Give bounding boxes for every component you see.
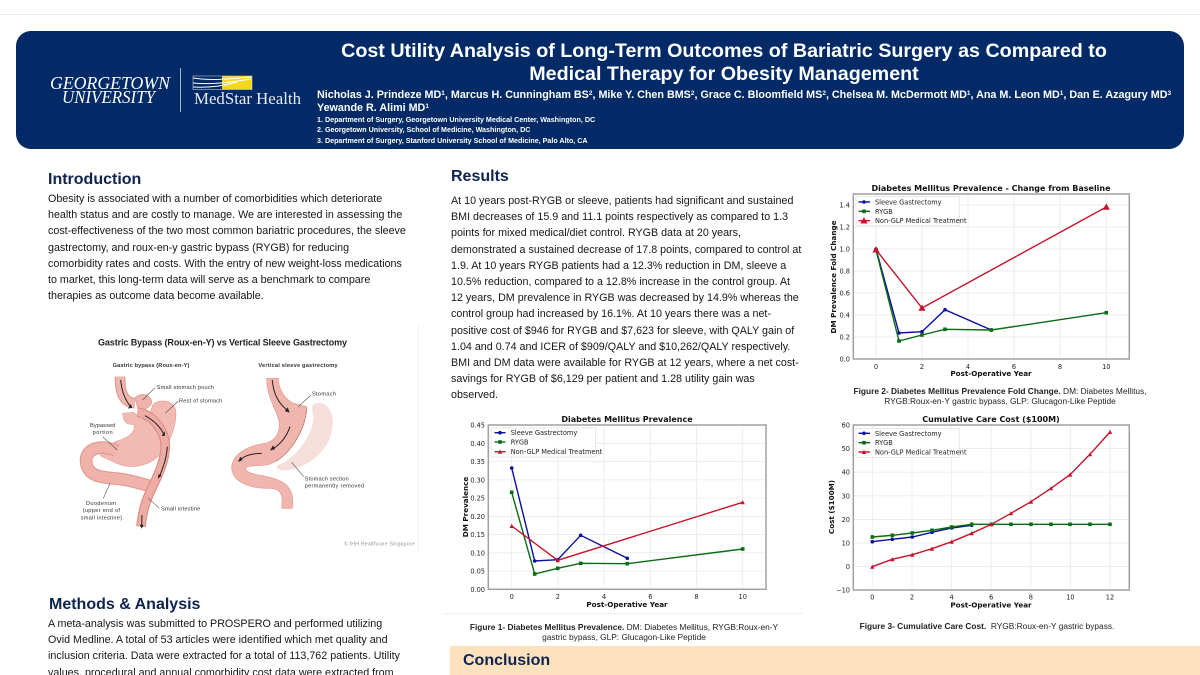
chart: figure 3 cumulative care cost: 10 [1066, 594, 1075, 602]
illustration: vertical sleeve gastrectomy: © IHH Healthcare Singapore [344, 540, 415, 547]
chart: figure 1 diabetes mellitus prevalence: 0.35 [470, 458, 485, 466]
illustration: gastric bypass: small intestine) [81, 515, 122, 521]
illustration: gastric bypass: portion [93, 430, 113, 436]
chart: figure 2 fold change: 0.6 [840, 290, 850, 298]
chart: figure 3 cumulative care cost: 0 [870, 594, 874, 602]
chart: figure 1 diabetes mellitus prevalence: 0.15 [470, 531, 485, 539]
chart: figure 3 cumulative care cost: Cost ($100M) [827, 480, 836, 534]
text: methods [48, 618, 400, 675]
chart: figure 3 cumulative care cost [827, 415, 1130, 610]
illustration: gastric bypass [81, 363, 222, 528]
text: results: 1.04 and 0.74 and ICER of $909/QALY and $10,262/QALY respectively. [451, 341, 790, 353]
chart: figure 3 cumulative care cost: 50 [842, 445, 850, 453]
text: results: BMI decreases of 15.9 and 11.1 points respectively as compared to 1.3 [451, 211, 788, 223]
illustration: gastric bypass: Bypassed [90, 423, 115, 429]
chart: figure 1 diabetes mellitus prevalence: RYGB [511, 438, 529, 446]
chart: figure 2 fold change: 0.4 [840, 312, 850, 320]
affiliations: 2. Georgetown University, School of Medicine, Washington, DC [317, 126, 530, 134]
divider under figure 1 [443, 613, 803, 614]
chart: figure 1 diabetes mellitus prevalence: Sleeve Gastrectomy [511, 429, 577, 437]
text: introduction: to market, this long-term data will serve as a benchmark to compare [48, 274, 370, 286]
text: introduction: gastrectomy, and roux-en-y gastric bypass (RYGB) for reducing [48, 242, 349, 254]
top rule [0, 14, 1200, 15]
illustration: gastric bypass vs sleeve [80, 325, 419, 550]
chart: figure 2 fold change: 0.8 [840, 268, 850, 276]
chart: figure 1 diabetes mellitus prevalence: 0.05 [470, 568, 485, 576]
chart: figure 1 diabetes mellitus prevalence: 0.40 [470, 440, 485, 448]
chart: figure 2 fold change: Post-Operative Year [950, 369, 1032, 378]
chart: figure 1 diabetes mellitus prevalence: Non-GLP Medical Treatment [511, 448, 603, 456]
chart: figure 1 diabetes mellitus prevalence: 0.10 [470, 549, 485, 557]
affiliations: 3. Department of Surgery, Stanford University School of Medicine, Palo Alto, CA [317, 136, 588, 144]
chart: figure 3 cumulative care cost: 10 [842, 540, 850, 548]
logo: Georgetown University [50, 73, 171, 107]
chart: figure 3 cumulative care cost: 6 [989, 594, 993, 602]
heading: methods & analysis: Methods & Analysis [49, 596, 200, 613]
chart: figure 3 cumulative care cost: −10 [836, 586, 850, 594]
text: results: 12 years, DM prevalence in RYGB was decreased by 14.9% whereas the [451, 292, 799, 304]
chart: figure 2 fold change: Diabetes Mellitus Prevalence - Change from Baseline [871, 184, 1111, 193]
chart: figure 3 cumulative care cost: Sleeve Gastrectomy [875, 430, 942, 438]
text: introduction: comorbidity rates and costs. With the entry of new weight-loss medications [48, 258, 402, 270]
chart: figure 2 fold change: Sleeve Gastrectomy [875, 198, 942, 206]
text: introduction: health status and are costly to manage. We are interested in assessing the [48, 209, 402, 221]
chart: figure 1 diabetes mellitus prevalence: 6 [648, 593, 652, 601]
text: results: 10.5% reduction, compared to a 12.8% increase in the control group. At [451, 276, 790, 288]
chart: figure 2 fold change: RYGB [875, 208, 893, 216]
title: Medical Therapy for Obesity Management [529, 63, 919, 85]
text: methods: Ovid Medline. A total of 53 articles were identified which met quality and [48, 634, 388, 646]
logo: Georgetown University: GEORGETOWN [50, 73, 171, 93]
illustration: gastric bypass: Small stomach pouch [157, 385, 214, 391]
caption: figure 3: Figure 3- Cumulative Care Cost. RYGB:Roux-en-Y gastric bypass. [860, 621, 1114, 631]
illustration: gastric bypass: Gastric bypass (Roux-en-Y) [113, 363, 189, 369]
header banner [16, 31, 1184, 149]
chart: figure 1 diabetes mellitus prevalence: Post-Operative Year [586, 600, 668, 609]
text: results: savings for RYGB of $6,129 per patient and 1.28 utility gain was [451, 373, 755, 385]
chart: figure 2 fold change: 6 [1012, 363, 1016, 371]
text: introduction: therapies as outcome data become available. [48, 290, 264, 302]
chart: figure 1 diabetes mellitus prevalence: 0.20 [470, 513, 485, 521]
heading: introduction: Introduction [48, 170, 141, 188]
text: methods: inclusion criteria. Data were extracted for a total of 113,762 patients. Utility [48, 650, 400, 662]
title [341, 40, 1107, 85]
authors [317, 88, 1171, 114]
illustration: gastric bypass: Small intestine [161, 507, 200, 513]
chart: figure 2 fold change [829, 184, 1130, 378]
chart: figure 1 diabetes mellitus prevalence: 0 [510, 593, 514, 601]
chart: figure 2 fold change: 1.4 [840, 202, 850, 210]
chart: figure 2 fold change: 0.2 [840, 334, 850, 342]
chart: figure 2 fold change: 4 [966, 363, 970, 371]
chart: figure 1 diabetes mellitus prevalence: 0.45 [470, 422, 485, 430]
caption: figure 1 [470, 622, 778, 642]
chart: figure 2 fold change: 10 [1102, 363, 1110, 371]
illustration: vertical sleeve gastrectomy: Stomach section [305, 476, 349, 482]
illustration: gastric bypass: (upper end of [83, 508, 120, 514]
chart: figure 3 cumulative care cost: 8 [1029, 594, 1033, 602]
chart: figure 1 diabetes mellitus prevalence: 0.30 [470, 476, 485, 484]
chart: figure 3 cumulative care cost: RYGB [875, 439, 893, 447]
text: results: points for mixed medical/diet control. RYGB data at 20 years, [451, 227, 741, 239]
text: introduction: Obesity is associated with a number of comorbidities which deteriorate [48, 193, 382, 205]
text: results: positive cost of $946 for RYGB and $7,623 for sleeve, with QALY gain of [451, 325, 794, 337]
chart: figure 1 diabetes mellitus prevalence: Diabetes Mellitus Prevalence [561, 415, 693, 424]
chart: figure 2 fold change: 0.0 [840, 356, 850, 364]
text: introduction [48, 193, 406, 302]
chart: figure 3 cumulative care cost: Post-Operative Year [950, 600, 1032, 610]
illustration: gastric bypass vs sleeve: Gastric Bypass (Roux-en-Y) vs Vertical Sleeve Gastrectomy [98, 338, 347, 348]
chart: figure 1 diabetes mellitus prevalence: 2 [556, 593, 560, 601]
logo: MedStar Health [192, 76, 301, 108]
chart: figure 2 fold change: 0 [874, 363, 878, 371]
chart: figure 3 cumulative care cost: 30 [842, 492, 850, 500]
illustration: gastric bypass: Duodenum [86, 501, 116, 507]
chart: figure 3 cumulative care cost: 12 [1106, 594, 1114, 602]
chart: figure 2 fold change: 1.2 [840, 224, 850, 232]
logo: MedStar Health: MedStar Health [194, 89, 301, 108]
chart: figure 3 cumulative care cost: Cumulative Care Cost ($100M) [922, 415, 1060, 424]
chart: figure 3 cumulative care cost: 2 [910, 594, 914, 602]
logo divider [180, 68, 181, 112]
text: results [451, 195, 802, 401]
affiliations [317, 116, 595, 144]
text: results: BMI and DM data were available for RYGB at 12 years, where a net cost- [451, 357, 799, 369]
text: results: observed. [451, 389, 498, 401]
chart: figure 2 fold change: 2 [920, 363, 924, 371]
text: results: At 10 years post-RYGB or sleeve, patients had significant and sustained [451, 195, 793, 207]
chart: figure 1 diabetes mellitus prevalence [461, 415, 767, 609]
chart: figure 1 diabetes mellitus prevalence: 4 [602, 593, 606, 601]
illustration: vertical sleeve gastrectomy: Stomach [312, 392, 336, 398]
caption: figure 1: Figure 1- Diabetes Mellitus Prevalence. DM: Diabetes Mellitus, RYGB:Roux-en-Y [470, 622, 778, 632]
chart: figure 3 cumulative care cost: Non-GLP Medical Treatment [875, 448, 967, 456]
caption: figure 2: RYGB:Roux-en-Y gastric bypass, GLP: Glucagon-Like Peptide [884, 396, 1116, 406]
illustration: gastric bypass: Rest of stomach [179, 398, 222, 404]
caption: figure 2 [853, 386, 1147, 406]
panel: conclusion [450, 646, 1200, 675]
chart: figure 3 cumulative care cost: 20 [842, 516, 850, 524]
chart: figure 1 diabetes mellitus prevalence: 0.00 [470, 586, 485, 594]
chart: figure 3 cumulative care cost: 60 [842, 422, 850, 430]
heading: results: Results [451, 168, 509, 185]
chart: figure 1 diabetes mellitus prevalence: 10 [739, 593, 747, 601]
illustration: vertical sleeve gastrectomy: Vertical sleeve gastrectomy [258, 363, 339, 369]
text: introduction: cost-effectiveness of the two most common bariatric procedures, the sleeve [48, 225, 406, 237]
affiliations: 1. Department of Surgery, Georgetown University Medical Center, Washington, DC [317, 116, 595, 124]
chart: figure 1 diabetes mellitus prevalence: 8 [694, 593, 699, 601]
text: results: control group had increased by 16.1%. At 10 years there was a net- [451, 308, 771, 320]
title: Cost Utility Analysis of Long-Term Outcomes of Bariatric Surgery as Compared to [341, 40, 1107, 62]
logo: Georgetown University: UNIVERSITY [62, 87, 157, 107]
caption: figure 2: Figure 2- Diabetes Mellitus Prevalence Fold Change. DM: Diabetes Mellitus, [853, 386, 1147, 396]
chart: figure 3 cumulative care cost: 4 [949, 594, 954, 602]
chart: figure 1 diabetes mellitus prevalence: DM Prevalence [461, 477, 470, 537]
heading: conclusion: Conclusion [463, 652, 550, 668]
chart: figure 2 fold change: 1.0 [840, 246, 850, 254]
authors: Nicholas J. Prindeze MD1, Marcus H. Cunningham BS2, Mike Y. Chen BMS2, Grace C. Bloomfield MS2, Chelsea M. McDermott MD1, Ana M. Leon MD1, Dan E. Azagury MD3 [317, 88, 1171, 100]
chart: figure 3 cumulative care cost: 40 [842, 469, 850, 477]
chart: figure 1 diabetes mellitus prevalence: 0.25 [470, 495, 485, 503]
illustration: vertical sleeve gastrectomy: permanently removed [305, 483, 364, 489]
chart: figure 3 cumulative care cost: 0 [846, 563, 850, 571]
chart: figure 2 fold change: Non-GLP Medical Treatment [875, 217, 967, 225]
authors: Yewande R. Alimi MD1 [317, 102, 429, 114]
chart: figure 2 fold change: DM Prevalence Fold Change [829, 220, 838, 333]
text: results: demonstrated a sustained decrease of 17.8 points, compared to control at [451, 244, 801, 256]
text: results: 1.9. At 10 years RYGB patients had a 12.3% reduction in DM, sleeve a [451, 260, 786, 272]
illustration: vertical sleeve gastrectomy [232, 363, 415, 547]
text: methods: A meta-analysis was submitted to PROSPERO and performed utilizing [48, 618, 382, 630]
caption: figure 1: gastric bypass, GLP: Glucagon-Like Peptide [542, 632, 706, 642]
chart: figure 2 fold change: 8 [1058, 363, 1062, 371]
